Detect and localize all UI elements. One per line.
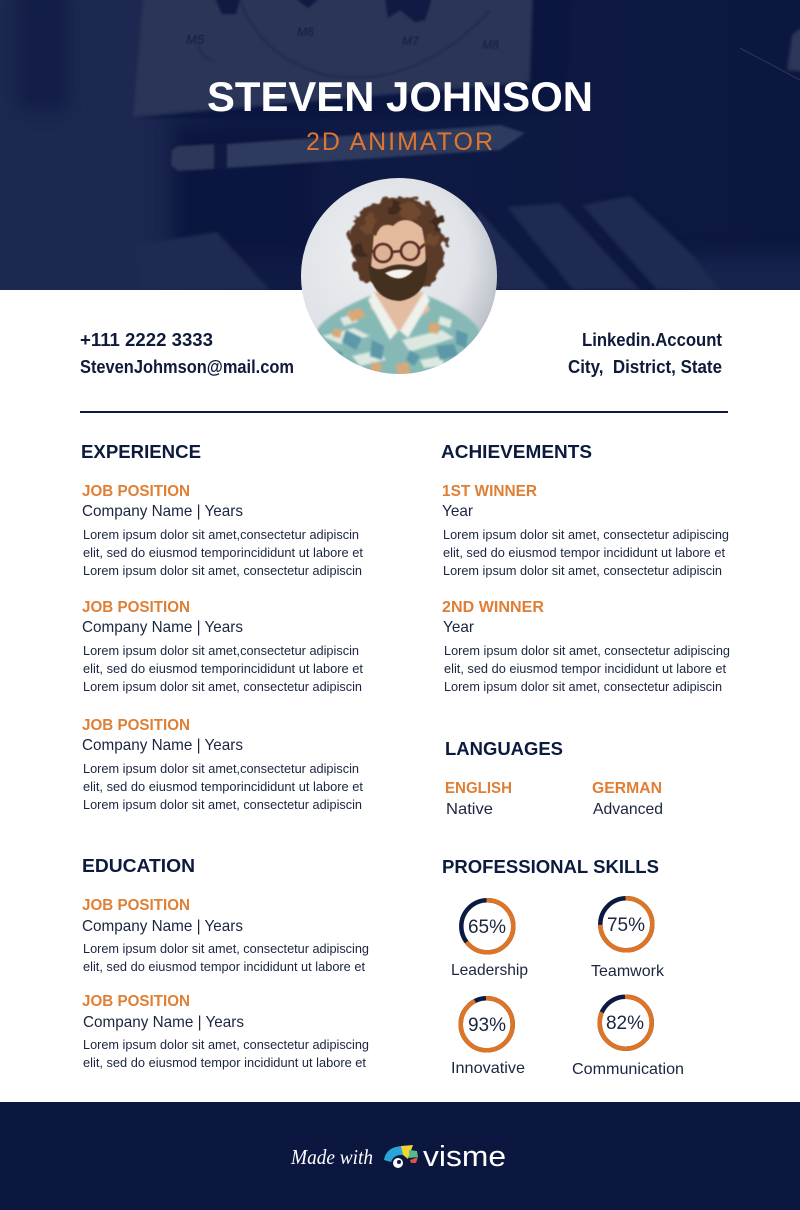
- education entry 1: Company Name | Years: [82, 918, 243, 935]
- skill: teamwork 75%: [591, 898, 665, 980]
- footer text: visme wordmark: visme: [423, 1141, 506, 1173]
- experience entry 2: JOB POSITION: [82, 599, 190, 616]
- language: english: [445, 780, 512, 818]
- education entry 2: Lorem ipsum dolor sit amet, consectetur adipiscing: [83, 1038, 369, 1052]
- experience entry 3: elit, sed do eiusmod temporincididunt ut labore et: [83, 780, 364, 794]
- heading: experience: EXPERIENCE: [81, 442, 201, 462]
- experience entry 2: [82, 599, 364, 694]
- experience entry 3: Lorem ipsum dolor sit amet, consectetur adipiscin: [83, 798, 362, 812]
- contact details left: StevenJohmson@mail.com: [80, 357, 294, 377]
- skill: leadership 65%: Leadership: [451, 962, 528, 979]
- achievement entry 2: [442, 599, 730, 694]
- skill: innovative 93%: 93%: [468, 1015, 506, 1036]
- achievement entry 2: 2ND WINNER: [442, 599, 544, 616]
- header banner with darkened desk photo: M6: [297, 25, 314, 39]
- contact details left: +111 2222 3333: [80, 330, 213, 350]
- panel: professional skills: [442, 857, 684, 1078]
- skill: innovative 93%: [451, 998, 525, 1077]
- skill: innovative 93%: Innovative: [451, 1060, 525, 1077]
- icon: visme logo: [384, 1145, 418, 1168]
- education entry 2: Company Name | Years: [83, 1014, 244, 1031]
- education entry 1: [82, 897, 369, 974]
- education entry 2: elit, sed do eiusmod tempor incididunt ut labore et: [83, 1056, 367, 1070]
- heading: achievements: ACHIEVEMENTS: [441, 442, 592, 462]
- language: german: Advanced: [593, 801, 663, 818]
- heading: professional skills: PROFESSIONAL SKILLS: [442, 857, 659, 877]
- achievement entry 2: Lorem ipsum dolor sit amet, consectetur adipiscing: [444, 644, 730, 658]
- panel: achievements: [441, 442, 730, 694]
- experience entry 2: Lorem ipsum dolor sit amet,consectetur adipiscin: [83, 644, 359, 658]
- panel: languages: [445, 739, 663, 818]
- contact details left: [80, 330, 294, 377]
- skill: teamwork 75%: 75%: [607, 915, 645, 936]
- language: german: GERMAN: [592, 780, 662, 797]
- achievement entry 1: elit, sed do eiusmod tempor incididunt ut labore et: [443, 546, 726, 560]
- experience entry 1: JOB POSITION: [82, 483, 190, 500]
- experience entry 2: Lorem ipsum dolor sit amet, consectetur adipiscin: [83, 680, 362, 694]
- language: german: [592, 780, 663, 818]
- experience entry 2: Company Name | Years: [82, 619, 243, 636]
- title: name: STEVEN JOHNSON: [207, 73, 593, 120]
- experience entry 3: [82, 717, 364, 812]
- contact details right: City, District, State: [568, 357, 722, 377]
- achievement entry 2: Year: [443, 619, 475, 636]
- achievement entry 2: elit, sed do eiusmod tempor incididunt ut labore et: [444, 662, 727, 676]
- experience entry 1: Lorem ipsum dolor sit amet, consectetur adipiscin: [83, 564, 362, 578]
- header banner with darkened desk photo: M8: [482, 38, 499, 52]
- education entry 2: JOB POSITION: [82, 993, 190, 1010]
- header banner with darkened desk photo: M7: [402, 34, 420, 48]
- contact details right: [568, 330, 722, 377]
- panel: education: [82, 856, 369, 1070]
- experience entry 3: JOB POSITION: [82, 717, 190, 734]
- experience entry 3: Company Name | Years: [82, 737, 243, 754]
- footer band: [0, 1102, 800, 1210]
- education entry 2: [82, 993, 369, 1070]
- achievement entry 2: Lorem ipsum dolor sit amet, consectetur adipiscin: [444, 680, 722, 694]
- skill: communication 82%: Communication: [572, 1061, 684, 1078]
- panel: experience: [81, 442, 364, 812]
- education entry 1: JOB POSITION: [82, 897, 190, 914]
- heading: education: EDUCATION: [82, 856, 195, 876]
- subtitle: job role: 2D ANIMATOR: [306, 128, 493, 156]
- portrait photo: [300, 177, 498, 380]
- header banner with darkened desk photo: [0, 0, 800, 305]
- experience entry 2: elit, sed do eiusmod temporincididunt ut labore et: [83, 662, 364, 676]
- experience entry 1: [82, 483, 364, 578]
- skill: communication 82%: 82%: [606, 1013, 644, 1034]
- achievement entry 1: Year: [442, 503, 474, 520]
- education entry 1: elit, sed do eiusmod tempor incididunt ut labore et: [83, 960, 366, 974]
- achievement entry 1: 1ST WINNER: [442, 483, 537, 500]
- skill: communication 82%: [572, 997, 684, 1078]
- language: english: Native: [446, 801, 493, 818]
- contact details right: Linkedin.Account: [582, 330, 722, 350]
- achievement entry 1: [442, 483, 729, 578]
- skill: teamwork 75%: Teamwork: [591, 963, 665, 980]
- header banner with darkened desk photo: M5: [186, 32, 205, 47]
- experience entry 1: elit, sed do eiusmod temporincididunt ut labore et: [83, 546, 364, 560]
- experience entry 3: Lorem ipsum dolor sit amet,consectetur adipiscin: [83, 762, 359, 776]
- skill: leadership 65%: [451, 900, 528, 979]
- skill: leadership 65%: 65%: [468, 917, 506, 938]
- education entry 1: Lorem ipsum dolor sit amet, consectetur adipiscing: [83, 942, 369, 956]
- language: english: ENGLISH: [445, 780, 512, 797]
- experience entry 1: Company Name | Years: [82, 503, 243, 520]
- heading: languages: LANGUAGES: [445, 739, 563, 759]
- achievement entry 1: Lorem ipsum dolor sit amet, consectetur adipiscin: [443, 564, 722, 578]
- achievement entry 1: Lorem ipsum dolor sit amet, consectetur adipiscing: [443, 528, 729, 542]
- experience entry 1: Lorem ipsum dolor sit amet,consectetur adipiscin: [83, 528, 359, 542]
- footer text: made with: Made with: [290, 1145, 373, 1169]
